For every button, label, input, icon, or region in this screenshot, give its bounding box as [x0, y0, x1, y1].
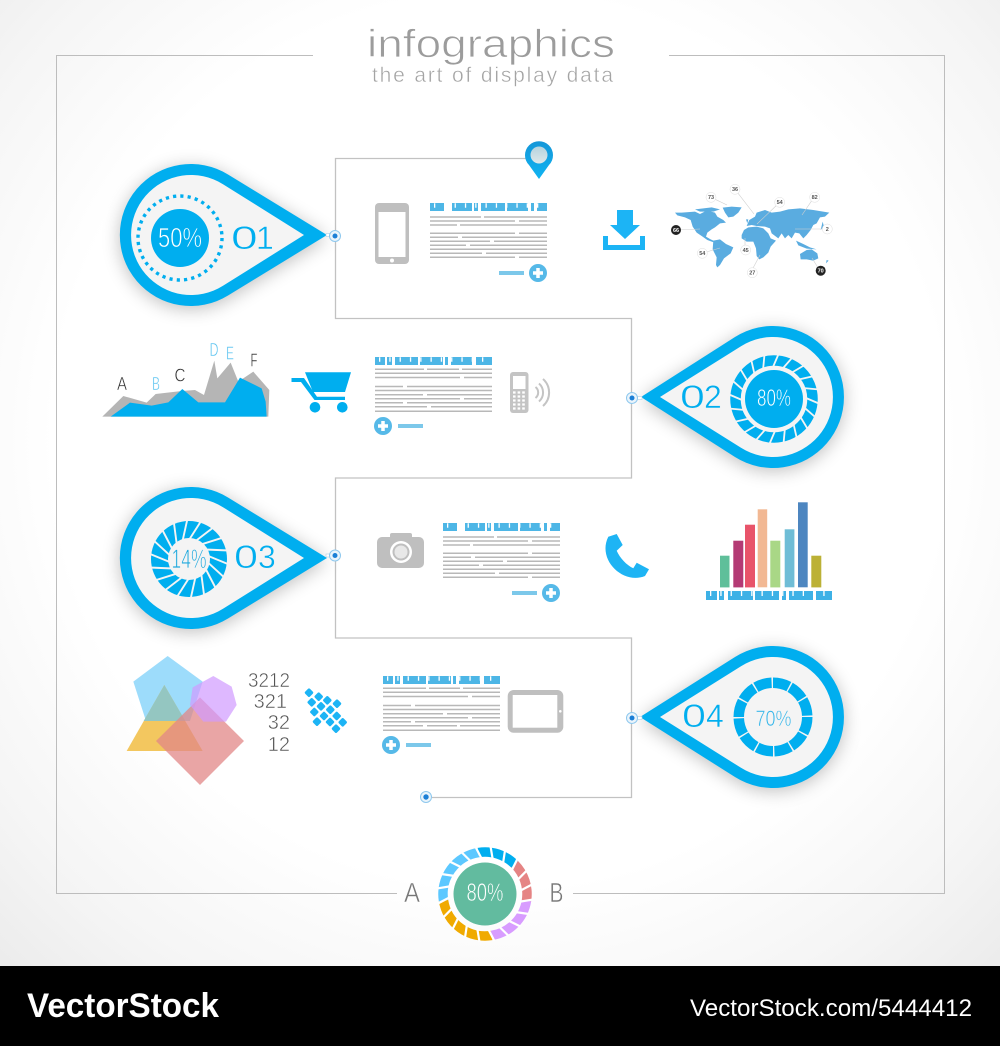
number 02: 0 [680, 380, 705, 415]
chart labels: C [174, 366, 186, 386]
overlapping shapes chart [127, 656, 290, 785]
segmented ring [728, 353, 820, 445]
icon: map pin [525, 141, 553, 179]
number 04 [682, 698, 724, 735]
chart caption [706, 591, 832, 600]
diamond [156, 697, 244, 785]
brand: VectorStock [27, 987, 219, 1025]
more label [512, 591, 537, 595]
pentagon [133, 656, 203, 721]
map leaders [676, 189, 827, 271]
title [367, 23, 615, 87]
donut segments [426, 835, 544, 953]
text block 2 [374, 357, 492, 435]
value list: 12 [268, 734, 290, 756]
disc 80% [745, 370, 803, 428]
map callouts: 66 [673, 228, 679, 234]
chart labels: F [250, 351, 258, 371]
donut separators [430, 839, 540, 949]
chart labels: A [117, 374, 127, 394]
text block 3 [443, 523, 560, 602]
icon: camera [377, 533, 424, 568]
blue area [111, 378, 267, 417]
value 70%: 70% [756, 706, 792, 731]
map landmasses [675, 207, 829, 267]
connector node 3 [326, 550, 340, 561]
connector node end [420, 792, 432, 802]
number 02: 2 [704, 379, 722, 415]
number 01: 1 [256, 220, 274, 256]
more label [499, 271, 524, 275]
number 01: 0 [231, 220, 258, 256]
map callouts: 54 [699, 251, 706, 257]
icon: tablet [508, 690, 563, 733]
value list: 32 [268, 712, 290, 734]
drop 02 [641, 326, 844, 471]
donut centre [454, 862, 516, 926]
icon: mobile phone with signal [510, 372, 549, 413]
icon: plus button [374, 417, 392, 435]
map callouts: 82 [812, 195, 818, 201]
map callouts: 70 [818, 269, 824, 275]
icon: plus button [382, 736, 400, 754]
map callouts: 2 [826, 227, 829, 233]
connector node 1 [326, 230, 340, 242]
map callouts: 73 [708, 195, 714, 201]
octagon [190, 676, 237, 722]
value list: 3212 [248, 670, 290, 692]
icon: download [603, 210, 645, 250]
drop 04 [640, 646, 844, 791]
map callouts: 54 [777, 200, 784, 206]
number 03: 3 [258, 539, 276, 575]
icon: dot grid [304, 688, 348, 734]
drop 01 [120, 164, 327, 309]
disc 50% [151, 209, 209, 267]
connector node 2 [626, 392, 642, 404]
text block 4 [382, 676, 500, 754]
value 80%: 80% [757, 385, 791, 412]
value 14%: 14% [172, 544, 206, 574]
drop 03 [120, 487, 327, 632]
icon: telephone handset [605, 534, 649, 578]
segmented ring [739, 683, 807, 751]
chart labels: E [226, 343, 234, 363]
more label [398, 424, 423, 428]
icon: smartphone [375, 203, 409, 264]
grey area [102, 361, 269, 417]
swirl disc [146, 516, 232, 602]
icon: shopping cart [292, 372, 351, 413]
subtitle: the art of display data [372, 64, 613, 87]
more label [406, 743, 431, 747]
connector node 4 [626, 712, 642, 724]
world map [671, 184, 832, 278]
value 50%: 50% [158, 222, 202, 253]
chart labels [117, 340, 258, 394]
number 04: 4 [706, 698, 724, 734]
text block 1 [430, 203, 547, 282]
bottom comparison donut [404, 835, 564, 953]
footer bar [0, 966, 1000, 1046]
icon: plus button [542, 584, 560, 602]
map callouts: 45 [743, 248, 749, 254]
number 03 [234, 539, 276, 576]
image id: VectorStock.com/5444412 [690, 995, 972, 1022]
value list: 321 [254, 691, 287, 713]
chart labels: D [210, 340, 218, 360]
bars [720, 502, 821, 587]
value 80%: 80% [466, 879, 504, 907]
heading: infographics: infographics [367, 23, 615, 66]
number 04: 0 [682, 699, 706, 735]
number 03: 0 [234, 540, 258, 576]
number 01 [231, 220, 274, 256]
map callouts [671, 184, 832, 278]
triangle [127, 685, 203, 751]
icon: plus button [529, 264, 547, 282]
dotted ring [138, 196, 222, 280]
connector line [336, 158, 632, 798]
value list [248, 670, 290, 756]
frame [56, 56, 944, 894]
map callouts: 36 [732, 187, 738, 193]
bar chart [706, 502, 832, 600]
map callouts: 27 [749, 271, 755, 277]
number 02 [680, 379, 722, 415]
chart labels: B [152, 374, 160, 394]
area chart [102, 340, 269, 417]
label B: B [550, 877, 564, 908]
label A: A [404, 877, 420, 908]
